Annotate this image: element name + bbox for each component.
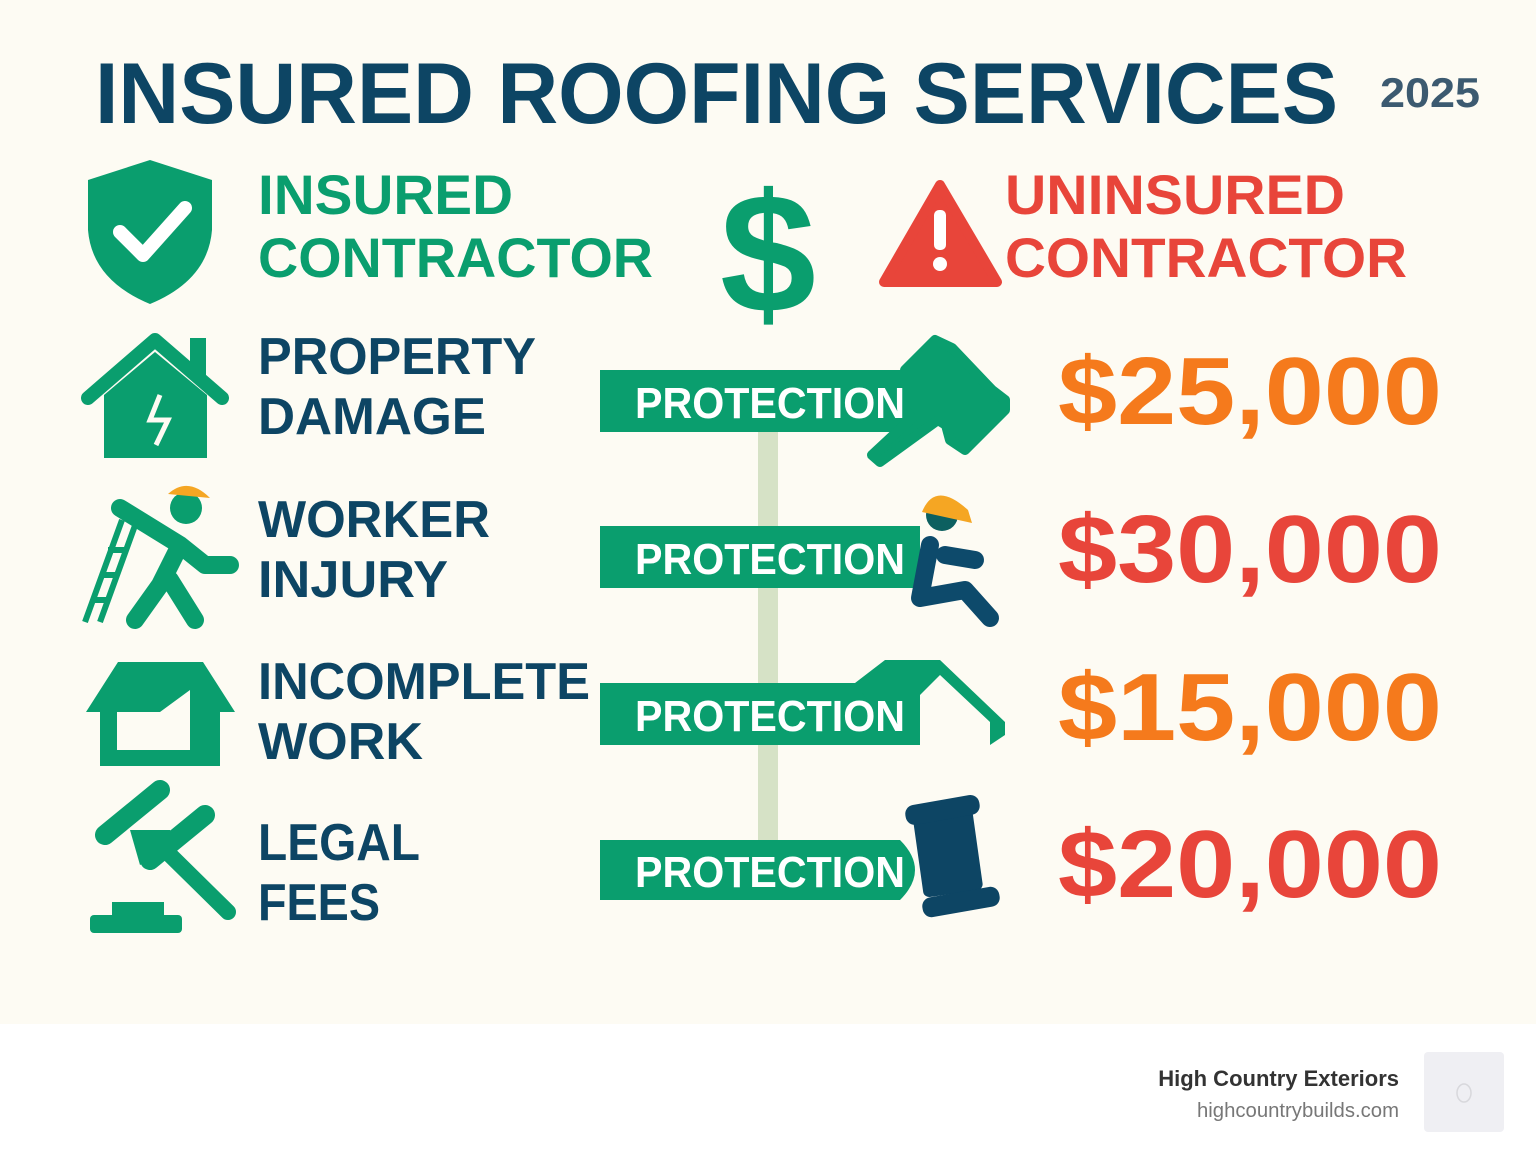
footer brand: High Country Exteriors: [1158, 1066, 1399, 1091]
title: INSURED ROOFING SERVICES: [95, 46, 1338, 142]
heading: insured contractor: CONTRACTOR: [258, 226, 653, 289]
signpost pole: [758, 430, 778, 840]
row 3 label: WORK: [258, 713, 423, 771]
row 3 cost: $15,000: [1058, 654, 1442, 761]
row 2 sign + worker: PROTECTION: [635, 535, 905, 584]
row 3 label: INCOMPLETE: [258, 653, 590, 711]
icon: dollar: $: [720, 159, 816, 349]
row 1 label: [258, 328, 536, 446]
heading: insured contractor: [258, 163, 653, 289]
heading: uninsured contractor: [1005, 163, 1407, 289]
row 3 sign + roof: [600, 660, 1005, 745]
row 3 label: [258, 653, 590, 771]
row 3 icon: house incomplete: [86, 662, 235, 766]
row 2 label: WORKER: [258, 491, 490, 549]
row 4 sign + gavel head: [600, 794, 1001, 919]
row 2 sign + worker: [600, 495, 990, 618]
row 4 label: [258, 814, 420, 932]
row 2 label: [258, 491, 490, 609]
row 2 icon: worker with ladder: [85, 486, 230, 622]
icon: shield check: [88, 160, 212, 304]
heading: uninsured contractor: UNINSURED: [1005, 163, 1345, 226]
title: 2025: [1380, 69, 1480, 116]
row 1 sign + gavel: PROTECTION: [635, 379, 905, 428]
footer logo: [1424, 1052, 1504, 1132]
row 4 label: FEES: [258, 874, 380, 932]
heading: uninsured contractor: CONTRACTOR: [1005, 226, 1407, 289]
footer brand: [1158, 1066, 1399, 1122]
footer brand: highcountrybuilds.com: [1197, 1100, 1399, 1122]
row 2 label: INJURY: [258, 551, 448, 609]
icon: warning triangle: [884, 185, 997, 282]
row 4 sign + gavel head: PROTECTION: [635, 848, 905, 897]
row 1 cost: $25,000: [1058, 338, 1442, 445]
heading: insured contractor: INSURED: [258, 163, 513, 226]
row 4 cost: $20,000: [1058, 811, 1442, 918]
row 4 label: LEGAL: [258, 814, 420, 872]
row 1 label: PROPERTY: [258, 328, 536, 386]
row 1 sign + gavel: [600, 340, 1005, 462]
row 1 icon: house damage: [88, 338, 222, 458]
row 3 sign + roof: PROTECTION: [635, 692, 905, 741]
row 1 label: DAMAGE: [258, 388, 486, 446]
row 2 cost: $30,000: [1058, 496, 1442, 603]
row 4 icon: gavel: [90, 790, 228, 933]
